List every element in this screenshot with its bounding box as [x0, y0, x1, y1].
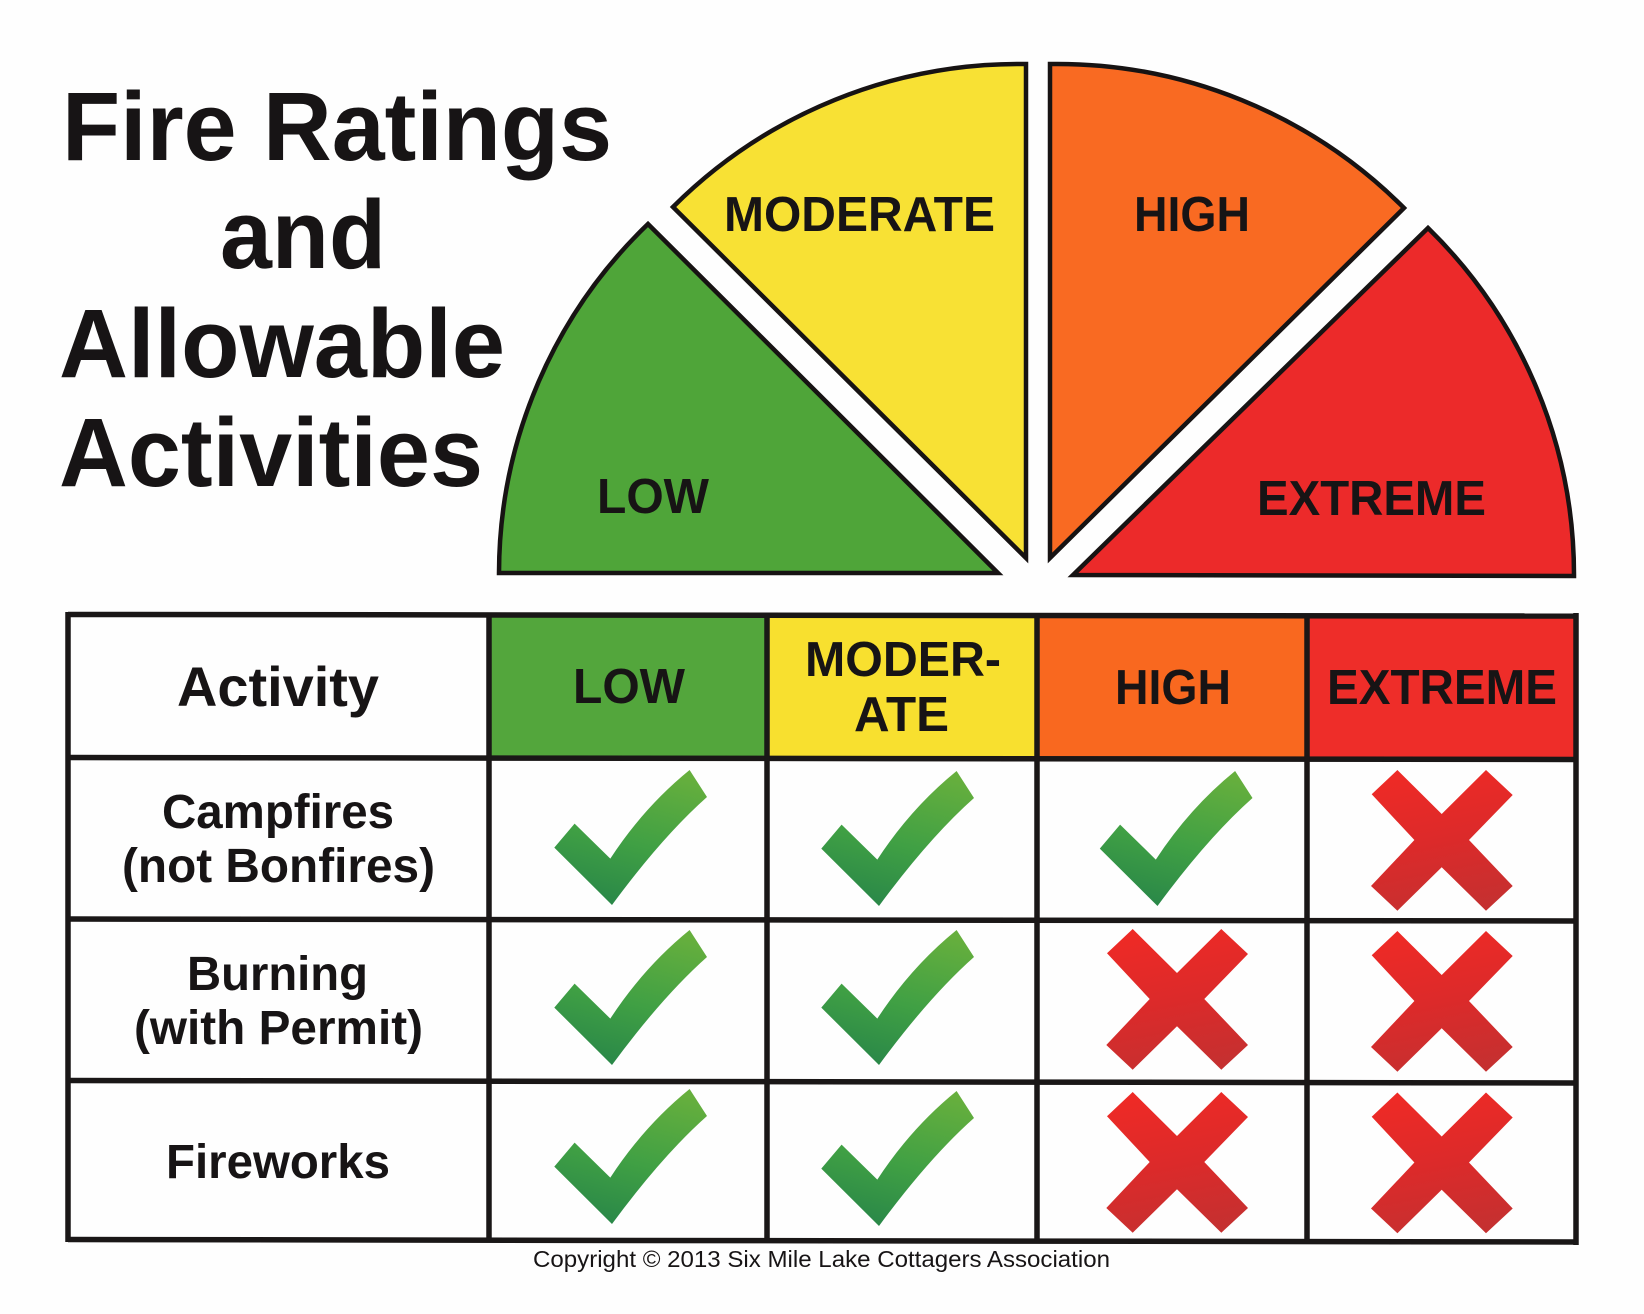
activity table	[68, 612, 1576, 1245]
title	[59, 72, 612, 507]
header: moderate: MODER-	[805, 633, 1001, 687]
semicircle gauge	[499, 64, 1574, 576]
icon: check, campfires high	[1100, 771, 1252, 906]
icon: cross, burning extreme	[1371, 931, 1513, 1072]
icon: check, campfires low	[554, 770, 707, 905]
icon: check, campfires moderate	[821, 771, 974, 906]
icon: cross, burning high	[1106, 929, 1248, 1070]
gauge sector: low: LOW	[597, 470, 710, 524]
title: Activities	[59, 398, 483, 507]
title: Fire Ratings	[62, 72, 612, 181]
gauge sector: low	[499, 224, 998, 573]
row label: burning: (with Permit)	[134, 1002, 423, 1055]
row label: burning	[134, 948, 423, 1055]
icon: check, fireworks moderate	[821, 1091, 974, 1226]
row label: burning: Burning	[187, 948, 368, 1001]
header cell fills	[489, 615, 1576, 759]
icon: check, burning moderate	[821, 930, 974, 1065]
header: moderate: ATE	[854, 688, 949, 742]
gauge sector: high: HIGH	[1134, 188, 1250, 242]
gauge sector: high	[1050, 64, 1404, 558]
gauge sector: extreme	[1073, 228, 1574, 576]
gauge sector: moderate: MODERATE	[724, 188, 995, 242]
row label: fireworks: Fireworks	[166, 1136, 390, 1189]
icon: cross, fireworks extreme	[1371, 1092, 1513, 1233]
header: activity: Activity	[177, 655, 379, 718]
title: Allowable	[59, 289, 505, 398]
row label: campfires: (not Bonfires)	[122, 840, 435, 893]
gauge sector: moderate	[673, 64, 1026, 558]
copyright line: Copyright © 2013 Six Mile Lake Cottagers Association	[533, 1246, 1110, 1272]
header: high: HIGH	[1115, 661, 1231, 715]
gauge sector: extreme: EXTREME	[1257, 472, 1486, 526]
header: low: LOW	[573, 660, 686, 714]
row label: campfires	[122, 786, 435, 893]
row label: campfires: Campfires	[162, 786, 394, 839]
header: moderate	[805, 633, 1001, 742]
icon: cross, fireworks high	[1106, 1092, 1248, 1233]
title: and	[220, 180, 386, 289]
icon: check, fireworks low	[554, 1089, 707, 1224]
icon: check, burning low	[554, 930, 707, 1065]
icon: cross, campfires extreme	[1371, 770, 1513, 911]
header: extreme: EXTREME	[1327, 661, 1557, 715]
